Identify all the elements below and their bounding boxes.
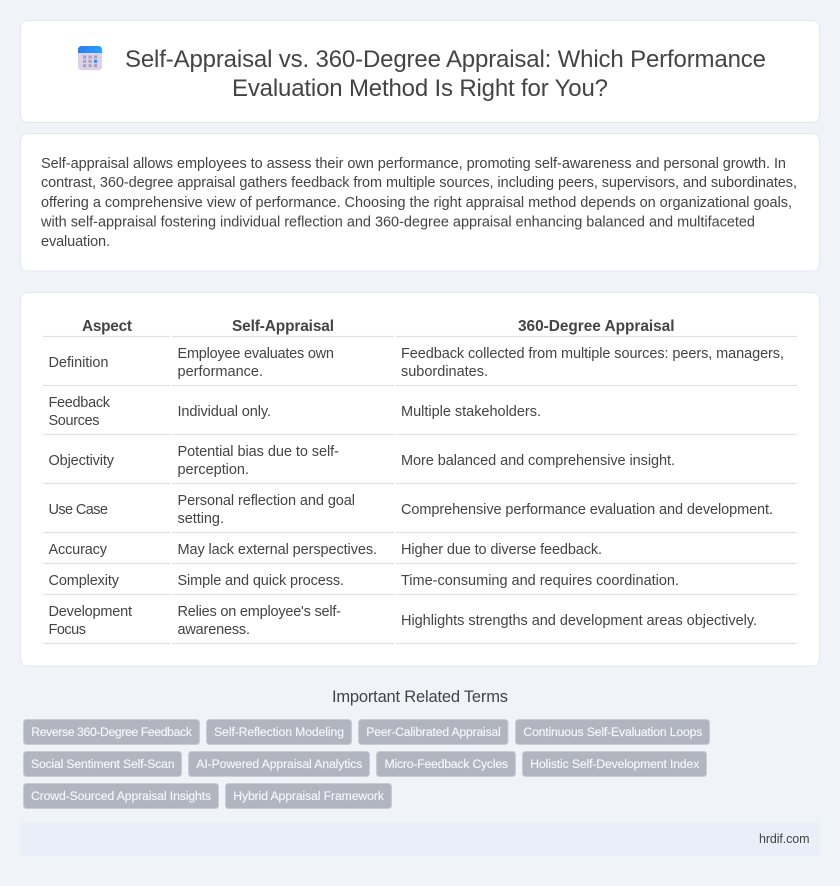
related term tags	[24, 720, 710, 808]
row: complexity	[48, 573, 679, 589]
row: use case: setting.	[178, 511, 224, 527]
row: use case: Comprehensive performance evaluation and development.	[401, 502, 773, 518]
row: accuracy: Higher due to diverse feedback.	[401, 542, 602, 558]
tag: hybrid framework	[226, 784, 392, 808]
row: development focus: Development	[48, 604, 132, 620]
tag: self-reflection: Self-Reflection Modeling	[214, 725, 344, 739]
tag: peer-calibrated	[358, 720, 508, 744]
row: feedback sources: Sources	[48, 413, 100, 429]
row: development focus: Focus	[48, 622, 86, 638]
row: definition: performance.	[178, 364, 263, 380]
tag: social sentiment	[24, 752, 182, 776]
icon: calendar	[78, 46, 102, 70]
row: objectivity: Objectivity	[48, 453, 115, 469]
footer	[20, 822, 820, 856]
row: feedback sources: Multiple stakeholders.	[401, 404, 541, 420]
row: feedback sources: Individual only.	[178, 404, 271, 420]
row: use case: Personal reflection and goal	[178, 493, 355, 509]
row: complexity: Complexity	[48, 573, 120, 589]
row: accuracy: Accuracy	[48, 542, 108, 558]
row: development focus: Relies on employee's self-	[178, 604, 341, 620]
tag: social sentiment: Social Sentiment Self-Scan	[31, 757, 174, 771]
table card	[20, 292, 820, 666]
row: feedback sources	[48, 395, 541, 429]
row: objectivity: More balanced and comprehensive insight.	[401, 453, 675, 469]
intro paragraph: Self-appraisal allows employees to assess their own performance, promoting self-awareness and personal growth. In	[41, 156, 786, 172]
row: use case: Use Case	[48, 502, 108, 518]
panel: comparison table	[20, 292, 820, 666]
heading: related terms: Important Related Terms	[332, 688, 508, 706]
tag: continuous loops: Continuous Self-Evaluation Loops	[523, 725, 702, 739]
tag: ai analytics	[188, 752, 370, 776]
row: definition: Feedback collected from multiple sources: peers, managers,	[401, 346, 784, 362]
row: definition: Definition	[48, 355, 108, 371]
table header row: Self-Appraisal	[232, 318, 334, 335]
panel: title header	[20, 20, 820, 122]
row: accuracy	[48, 542, 602, 558]
title	[125, 46, 766, 102]
row: objectivity: Potential bias due to self-	[178, 444, 339, 460]
row: development focus: Highlights strengths and development areas objectively.	[401, 613, 757, 629]
tag: self-reflection	[206, 720, 352, 744]
intro paragraph: offering a comprehensive view of performance. Choosing the right appraisal method depends on organizational goals,	[41, 195, 792, 211]
tag: ai analytics: AI-Powered Appraisal Analytics	[196, 757, 362, 771]
footer bar	[20, 822, 820, 856]
row: complexity: Simple and quick process.	[178, 573, 344, 589]
tag: continuous loops	[516, 720, 710, 744]
intro paragraph: with self-appraisal fostering individual reflection and 360-degree appraisal enhancing balanced and multifaceted	[40, 214, 755, 230]
header card	[20, 20, 820, 122]
table header row: 360-Degree Appraisal	[518, 318, 674, 335]
row: definition: Employee evaluates own	[178, 346, 334, 362]
tag: hybrid framework: Hybrid Appraisal Framework	[233, 789, 385, 803]
intro paragraph: evaluation.	[41, 234, 110, 250]
intro card	[20, 134, 820, 271]
row: development focus	[48, 604, 757, 638]
row: definition: subordinates.	[401, 364, 488, 380]
table header row	[82, 318, 674, 335]
row: use case	[48, 493, 773, 527]
row: feedback sources: Feedback	[48, 395, 111, 411]
row: accuracy: May lack external perspectives.	[178, 542, 377, 558]
tag: reverse feedback: Reverse 360-Degree Feedback	[31, 725, 193, 739]
tag: peer-calibrated: Peer-Calibrated Appraisal	[366, 725, 501, 739]
row: development focus: awareness.	[178, 622, 250, 638]
row: objectivity: perception.	[178, 462, 249, 478]
intro paragraph	[40, 156, 797, 250]
tag: crowd-sourced	[24, 784, 218, 808]
row: complexity: Time-consuming and requires coordination.	[401, 573, 679, 589]
table rules	[43, 336, 797, 644]
panel: introduction	[20, 134, 820, 271]
tag: micro-feedback: Micro-Feedback Cycles	[384, 757, 508, 771]
row: objectivity	[48, 444, 675, 478]
table header row: Aspect	[82, 318, 132, 335]
tag: micro-feedback	[376, 752, 516, 776]
title: Evaluation Method Is Right for You?	[232, 75, 608, 102]
tag: crowd-sourced: Crowd-Sourced Appraisal Insights	[31, 789, 211, 803]
footer site name: hrdif.com	[759, 832, 810, 846]
row: definition	[48, 346, 784, 380]
intro paragraph: contrast, 360-degree appraisal gathers feedback from multiple sources, including peers, supervisors, and subordinates,	[41, 175, 797, 191]
tag: reverse feedback	[24, 720, 200, 744]
tag: holistic index	[522, 752, 706, 776]
title: Self-Appraisal vs. 360-Degree Appraisal: Which Performance	[125, 46, 766, 73]
tag: holistic index: Holistic Self-Development Index	[530, 757, 699, 771]
